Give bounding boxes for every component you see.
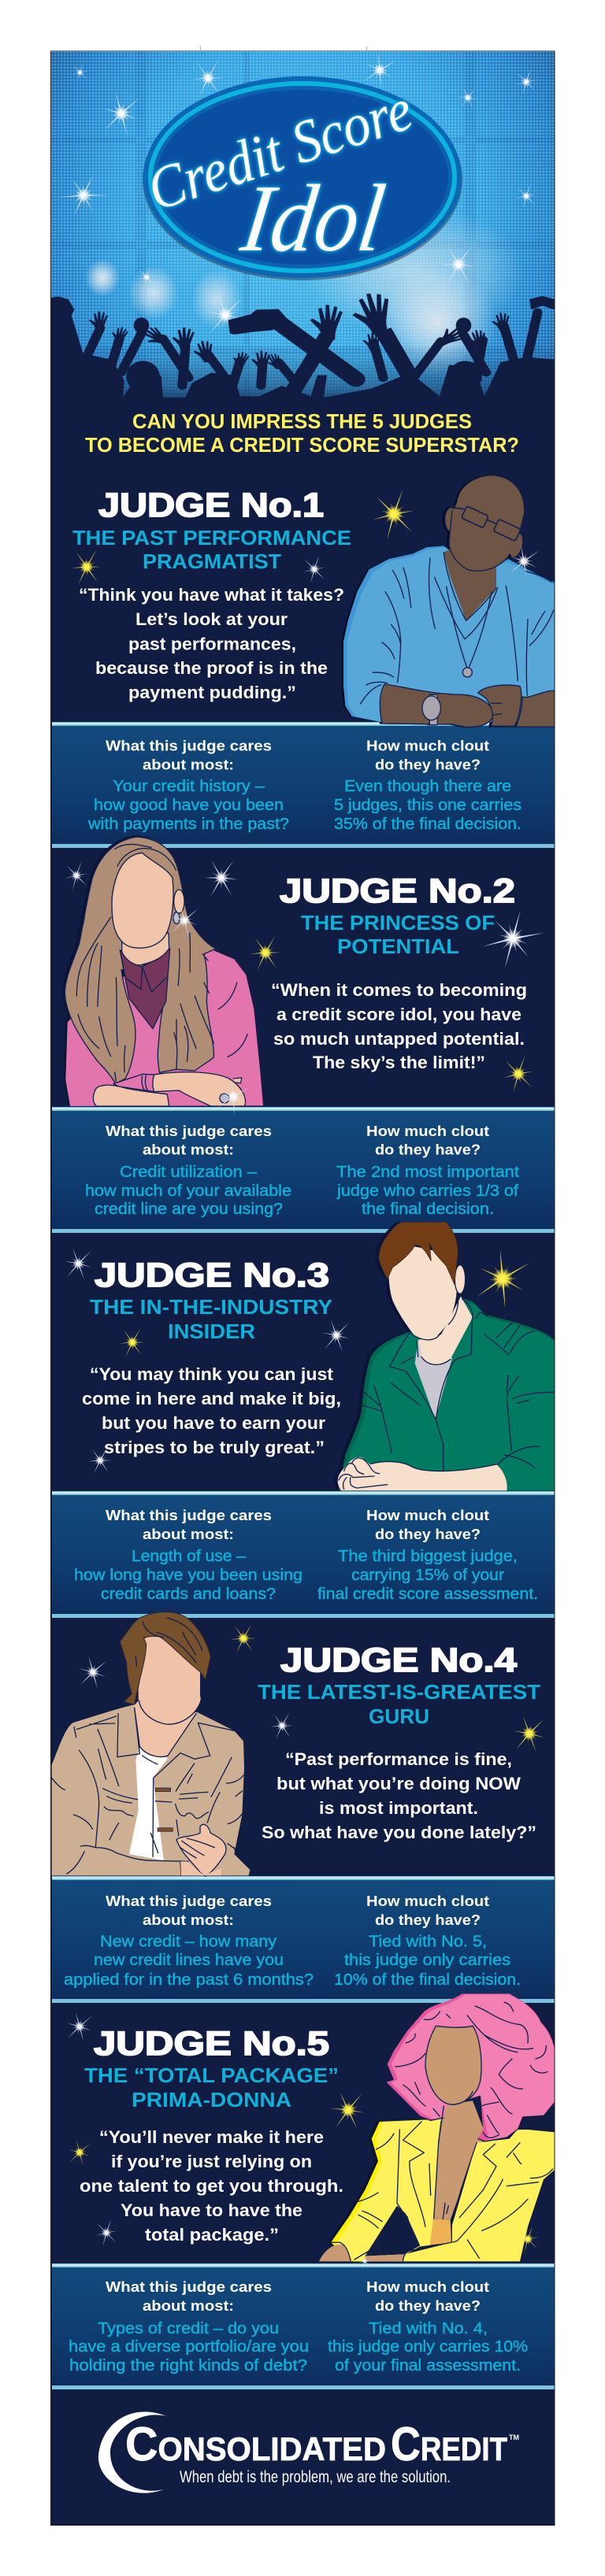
- figure: judge 2 woman in pink: [65, 837, 263, 1106]
- judge 1 quote: payment pudding.”: [128, 683, 296, 702]
- figure: judge 5 woman with pink hair and yellow blazer: [319, 1993, 555, 2261]
- judge 2 quote: “When it comes to becoming: [271, 980, 527, 1000]
- band text: what this judge cares about: about most:: [143, 1526, 234, 1542]
- sparkle stars: judge 3: [58, 1240, 540, 1477]
- band text: how much clout: do they have?: [375, 756, 481, 773]
- band text: how much clout: this judge only carries 10%: [328, 2338, 528, 2356]
- band text: what this judge cares about: about most:: [143, 1912, 234, 1928]
- band text: how much clout: Even though there are: [344, 778, 511, 795]
- judge 3 subtitle: [90, 1297, 332, 1343]
- band text: what this judge cares about: Types of credit – do you: [98, 2320, 279, 2337]
- band text: how much clout: [334, 737, 521, 833]
- band text: how much clout: this judge only carries: [344, 1952, 510, 1969]
- judge 1 subtitle: THE PAST PERFORMANCE: [72, 527, 351, 550]
- title: Idol: Idol: [235, 165, 391, 272]
- judge 5 quote: “You’ll never make it here: [99, 2127, 324, 2147]
- band text: what this judge cares about: how long have you been using: [74, 1567, 302, 1584]
- band text: how much clout: 10% of the final decision.: [334, 1971, 521, 1989]
- wordmark: Consolidated: CONSOLIDATED: [125, 2418, 386, 2471]
- icon: crescent: [98, 2411, 166, 2493]
- judge 5 quote: if you’re just relying on: [111, 2152, 312, 2171]
- judge 4 subtitle: GURU: [369, 1706, 429, 1728]
- judge 5 quote: You have to have the: [121, 2200, 302, 2220]
- judge 5 quote: total package.”: [145, 2225, 279, 2245]
- judge 4 heading: JUDGE No.4: [280, 1641, 517, 1679]
- band text: what this judge cares about: Length of use –: [132, 1548, 247, 1565]
- judge 1 quote: past performances,: [128, 635, 296, 653]
- band text: what this judge cares about: about most:: [143, 1142, 234, 1157]
- band text: what this judge cares about: [69, 2278, 309, 2374]
- figure: judge 1 man in blue shirt: [343, 476, 555, 727]
- band text: how much clout: [317, 1507, 538, 1603]
- sparkle stars: judge 4: [72, 1620, 551, 1758]
- judge 5 heading: JUDGE No.5: [94, 2025, 329, 2063]
- judge 2 heading: JUDGE No.2: [280, 872, 515, 910]
- band text: what this judge cares about: with payments in the past?: [87, 816, 289, 833]
- sparkle stars: judge 5: [61, 2007, 539, 2270]
- trademark: TM: [509, 2434, 519, 2441]
- band text: what this judge cares about: [87, 737, 289, 833]
- band text: what this judge cares about: What this judge cares: [106, 1893, 272, 1909]
- wordmark: Credit: CREDIT: [391, 2418, 507, 2471]
- band text: how much clout: carrying 15% of your: [351, 1567, 504, 1584]
- band text: what this judge cares about: have a diverse portfolio/are you: [69, 2338, 309, 2356]
- judge 4 quote: is most important.: [319, 1798, 478, 1818]
- band text: how much clout: do they have?: [375, 1142, 481, 1157]
- sparkle stars: banner: [54, 46, 537, 344]
- judge 3 subtitle: THE IN-THE-INDUSTRY: [90, 1297, 332, 1319]
- panel: judge 1 facts band: [52, 722, 555, 848]
- title: Credit Score: Credit Score: [139, 76, 420, 224]
- band text: how much clout: The 2nd most important: [336, 1164, 519, 1181]
- sparkle stars: judge 1: [69, 489, 546, 588]
- judge 3 subtitle: INSIDER: [168, 1321, 255, 1343]
- band text: what this judge cares about: [64, 1893, 314, 1989]
- panel: judge 2 facts band: [52, 1107, 555, 1233]
- judge 4 quote: So what have you done lately?”: [262, 1823, 536, 1842]
- intro question: [85, 411, 519, 457]
- band text: how much clout: 5 judges, this one carries: [334, 797, 521, 814]
- band text: how much clout: do they have?: [375, 1912, 481, 1928]
- band text: what this judge cares about: Your credit history –: [113, 778, 265, 795]
- judge 1 quote: because the proof is in the: [95, 658, 328, 678]
- band text: what this judge cares about: What this judge cares: [106, 1507, 272, 1523]
- panel: infographic background: [50, 51, 555, 2526]
- band text: what this judge cares about: credit cards and loans?: [101, 1586, 276, 1603]
- band text: how much clout: [334, 1893, 521, 1989]
- judge 4 quote: [262, 1749, 536, 1842]
- judge 4 subtitle: THE LATEST-IS-GREATEST: [258, 1682, 540, 1704]
- band text: how much clout: [328, 2278, 528, 2374]
- marks above the panel: [200, 46, 367, 51]
- judge 4 quote: but what you’re doing NOW: [277, 1774, 521, 1793]
- band text: what this judge cares about: New credit – how many: [100, 1934, 277, 1951]
- logo oval: Credit Score Idol: [139, 76, 462, 280]
- band text: what this judge cares about: about most:: [143, 2297, 234, 2314]
- band text: what this judge cares about: about most:: [143, 756, 234, 773]
- judge 4 quote: “Past performance is fine,: [285, 1749, 512, 1769]
- judge 4 subtitle: [258, 1682, 540, 1728]
- figure: judge 4 man in tan jacket: [52, 1612, 250, 1876]
- judge 3 quote: stripes to be truly great.”: [104, 1438, 325, 1457]
- band text: what this judge cares about: holding the right kinds of debt?: [69, 2357, 307, 2374]
- tagline: When debt is the problem, we are the solution.: [180, 2468, 451, 2486]
- intro question: CAN YOU IMPRESS THE 5 JUDGES: [132, 411, 472, 433]
- band text: what this judge cares about: new credit lines have you: [94, 1952, 284, 1969]
- band text: what this judge cares about: how much of your available: [85, 1183, 291, 1200]
- figure: judge 3 man in green jacket: [338, 1222, 555, 1490]
- band text: how much clout: How much clout: [366, 1507, 489, 1523]
- band text: what this judge cares about: applied for in the past 6 months?: [64, 1971, 314, 1989]
- band text: how much clout: final credit score assessment.: [317, 1586, 538, 1603]
- logo: Consolidated Credit: [98, 2411, 519, 2493]
- band text: what this judge cares about: [85, 1123, 291, 1218]
- judge 5 subtitle: [84, 2065, 339, 2112]
- judge 5 quote: [80, 2127, 343, 2245]
- judge 3 heading: JUDGE No.3: [95, 1257, 329, 1294]
- band text: what this judge cares about: credit line are you using?: [95, 1201, 283, 1218]
- band text: how much clout: How much clout: [366, 2278, 489, 2295]
- judge 1 quote: Let’s look at your: [135, 609, 288, 629]
- judge 2 quote: a credit score idol, you have: [277, 1005, 521, 1024]
- band text: how much clout: [336, 1123, 519, 1218]
- band text: how much clout: do they have?: [375, 2297, 481, 2314]
- panel: judge 3 facts band: [52, 1491, 555, 1618]
- band text: what this judge cares about: how good have you been: [94, 797, 284, 814]
- judge 3 quote: “You may think you can just: [90, 1364, 334, 1384]
- judge 1 subtitle: PRAGMATIST: [143, 551, 281, 573]
- judge 2 subtitle: THE PRINCESS OF: [301, 912, 495, 935]
- judge 5 subtitle: PRIMA-DONNA: [132, 2089, 291, 2112]
- band text: how much clout: judge who carries 1/3 of: [336, 1183, 518, 1200]
- band text: how much clout: 35% of the final decision.: [334, 816, 521, 833]
- crowd silhouette with raised hands: [50, 291, 555, 417]
- judge 3 quote: but you have to earn your: [102, 1413, 325, 1433]
- band text: how much clout: of your final assessment.: [335, 2357, 521, 2374]
- band text: how much clout: Tied with No. 5,: [369, 1934, 487, 1951]
- band text: how much clout: Tied with No. 4,: [369, 2320, 488, 2337]
- band text: how much clout: The third biggest judge,: [338, 1548, 518, 1565]
- judge 1 quote: [79, 585, 344, 702]
- band text: how much clout: How much clout: [366, 737, 489, 754]
- band text: what this judge cares about: [74, 1507, 302, 1603]
- band text: how much clout: do they have?: [375, 1526, 481, 1542]
- band text: what this judge cares about: What this judge cares: [106, 737, 272, 754]
- judge 2 quote: [271, 980, 527, 1072]
- band text: what this judge cares about: Credit utilization –: [120, 1164, 258, 1181]
- band text: how much clout: the final decision.: [362, 1201, 494, 1218]
- judge 2 quote: so much untapped potential.: [273, 1029, 525, 1049]
- band text: what this judge cares about: What this judge cares: [106, 1123, 272, 1139]
- panel: judge 5 facts band: [52, 2263, 555, 2389]
- judge 2 subtitle: POTENTIAL: [337, 936, 459, 958]
- judge 3 quote: come in here and make it big,: [82, 1389, 341, 1408]
- panel: judge 4 facts band: [52, 1876, 555, 2003]
- judge 1 subtitle: [72, 527, 351, 573]
- sparkle stars: judge 2: [65, 853, 551, 1121]
- band text: how much clout: How much clout: [366, 1893, 489, 1909]
- judge 1 quote: “Think you have what it takes?: [79, 585, 344, 605]
- judge 5 subtitle: THE “TOTAL PACKAGE”: [84, 2065, 339, 2087]
- panel: stage banner: [50, 46, 555, 417]
- judge 5 quote: one talent to get you through.: [80, 2176, 343, 2196]
- band text: how much clout: How much clout: [366, 1123, 489, 1139]
- judge 3 quote: [82, 1364, 341, 1457]
- judge 2 subtitle: [301, 912, 495, 958]
- judge 1 heading: JUDGE No.1: [98, 487, 324, 524]
- judge 2 quote: The sky’s the limit!”: [313, 1053, 485, 1072]
- intro question: TO BECOME A CREDIT SCORE SUPERSTAR?: [85, 435, 519, 457]
- band text: what this judge cares about: What this judge cares: [106, 2278, 272, 2295]
